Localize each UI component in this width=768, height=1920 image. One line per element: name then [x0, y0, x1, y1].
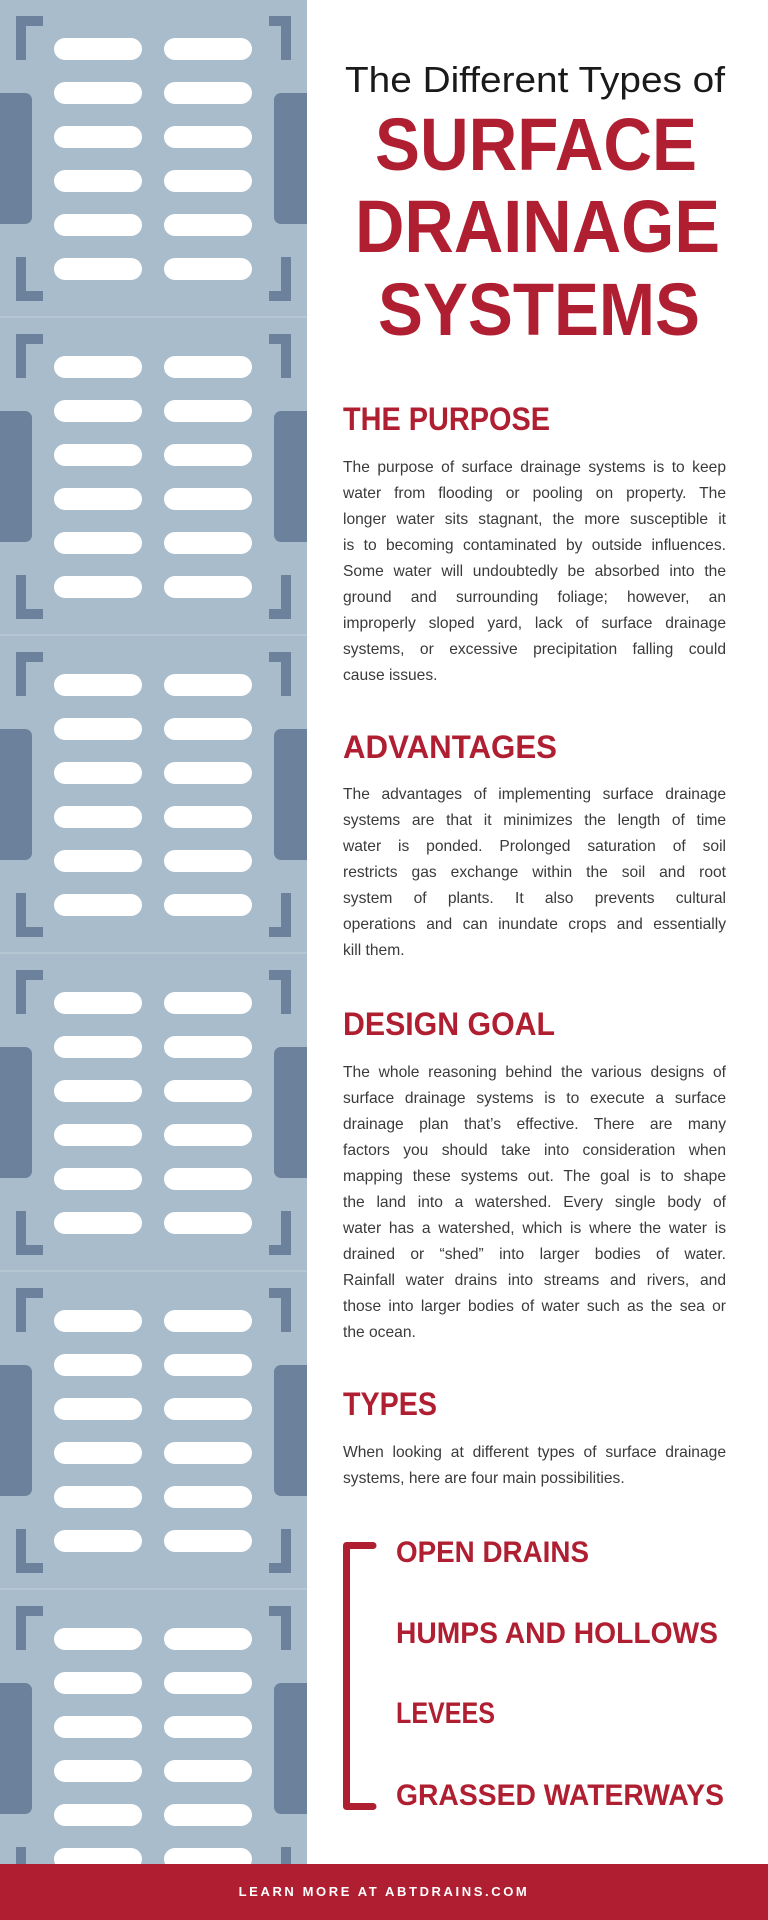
text: design goal body: The whole reasoning behind the various designs of: [343, 1064, 726, 1081]
title: DRAINAGE: [355, 185, 720, 268]
text: purpose body: The purpose of surface drainage systems is to keep: [343, 459, 726, 476]
panel: drain grate pattern: [0, 0, 307, 1864]
heading: design goal: DESIGN GOAL: [343, 1006, 555, 1042]
heading: types: TYPES: [343, 1386, 437, 1422]
heading: the purpose: THE PURPOSE: [343, 401, 550, 437]
text: design goal body: factors you should take into consideration when: [343, 1142, 726, 1159]
list: drainage types: GRASSED WATERWAYS: [396, 1779, 724, 1812]
text: advantages body: operations and can inundate crops and essentially: [343, 916, 726, 933]
text: advantages body: water is ponded. Prolonged saturation of soil: [343, 838, 726, 855]
text: design goal body: water has a watershed, which is where the water is: [343, 1220, 726, 1237]
text: purpose body: Some water will undoubtedly be absorbed into the: [343, 563, 726, 580]
text: purpose body: longer water sits stagnant, the more susceptible it: [343, 511, 726, 528]
text: types intro: systems, here are four main possibilities.: [343, 1470, 625, 1487]
footer: [0, 1864, 768, 1920]
text: advantages body: [343, 786, 726, 959]
text: advantages body: The advantages of implementing surface drainage: [343, 786, 726, 803]
text: types intro: [343, 1444, 726, 1487]
text: design goal body: Rainfall water drains into streams and rivers, and: [343, 1272, 726, 1289]
text: design goal body: mapping these systems out. The goal is to shape: [343, 1168, 726, 1185]
text: purpose body: systems, or excessive precipitation falling could: [343, 641, 726, 658]
title: SURFACE: [375, 103, 697, 186]
text: purpose body: water from flooding or pooling on property. The: [343, 485, 726, 502]
text: design goal body: those into larger bodies of water such as the sea or: [343, 1298, 726, 1315]
text: advantages body: restricts gas exchange within the soil and root: [343, 864, 726, 881]
title: SYSTEMS: [378, 268, 700, 350]
text: purpose body: is to becoming contaminated by outside influences.: [343, 537, 726, 554]
list: drainage types: OPEN DRAINS: [396, 1536, 589, 1569]
text: types intro: When looking at different types of surface drainage: [343, 1444, 726, 1461]
list: drainage types: HUMPS AND HOLLOWS: [396, 1617, 718, 1650]
text: purpose body: [343, 459, 726, 684]
text: purpose body: cause issues.: [343, 667, 437, 684]
text: advantages body: systems are that it minimizes the length of time: [343, 812, 726, 829]
text: design goal body: the land into a watershed. Every single body of: [343, 1194, 726, 1211]
list: drainage types: LEVEES: [396, 1697, 495, 1730]
text: design goal body: drained or “shed” into larger bodies of water.: [343, 1246, 726, 1263]
text: purpose body: ground and surrounding foliage; however, an: [343, 589, 726, 606]
title: The Different Types of: [345, 59, 726, 100]
footer: LEARN MORE AT ABTDRAINS.COM: [239, 1884, 529, 1899]
text: advantages body: system of plants. It also prevents cultural: [343, 890, 726, 907]
text: design goal body: surface drainage systems is to execute a surface: [343, 1090, 726, 1107]
text: purpose body: improperly sloped yard, lack of surface drainage: [343, 615, 726, 632]
bracket: [346, 1546, 373, 1806]
text: design goal body: [343, 1064, 726, 1341]
heading: advantages: ADVANTAGES: [343, 729, 557, 765]
title: [345, 59, 726, 350]
text: design goal body: the ocean.: [343, 1324, 416, 1341]
list: drainage types: [343, 1536, 724, 1812]
text: design goal body: drainage plan that’s effective. There are many: [343, 1116, 726, 1133]
text: advantages body: kill them.: [343, 942, 405, 959]
